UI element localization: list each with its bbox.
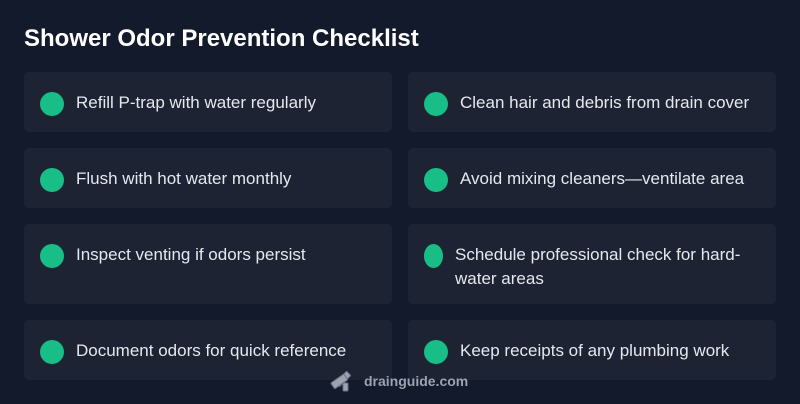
- card: inspect venting: [24, 224, 392, 304]
- footer logo: drainguide.com: [364, 373, 468, 389]
- card: clean hair: [408, 72, 776, 132]
- card: refill p-trap: [24, 72, 392, 132]
- card: clean hair: Clean hair and debris from drain cover: [460, 93, 749, 112]
- card: flush hot water: Flush with hot water monthly: [76, 169, 291, 188]
- icon: pipe: [330, 371, 351, 392]
- footer logo: [330, 371, 468, 392]
- card: keep receipts: Keep receipts of any plumbing work: [460, 341, 729, 360]
- card: flush hot water: [24, 148, 392, 208]
- card: avoid mixing cleaners: [408, 148, 776, 208]
- title: Shower Odor Prevention Checklist: [24, 25, 419, 52]
- card: refill p-trap: Refill P-trap with water regularly: [76, 93, 316, 112]
- card: document odors: [24, 320, 392, 380]
- card: schedule professional check: Schedule professional check for hard-: [455, 245, 740, 264]
- card: avoid mixing cleaners: Avoid mixing cleaners—ventilate area: [460, 169, 744, 188]
- card: schedule professional check: water areas: [455, 269, 544, 288]
- card: document odors: Document odors for quick reference: [76, 341, 346, 360]
- card: keep receipts: [408, 320, 776, 380]
- card: schedule professional check: [408, 224, 776, 304]
- card: inspect venting: Inspect venting if odors persist: [76, 245, 306, 264]
